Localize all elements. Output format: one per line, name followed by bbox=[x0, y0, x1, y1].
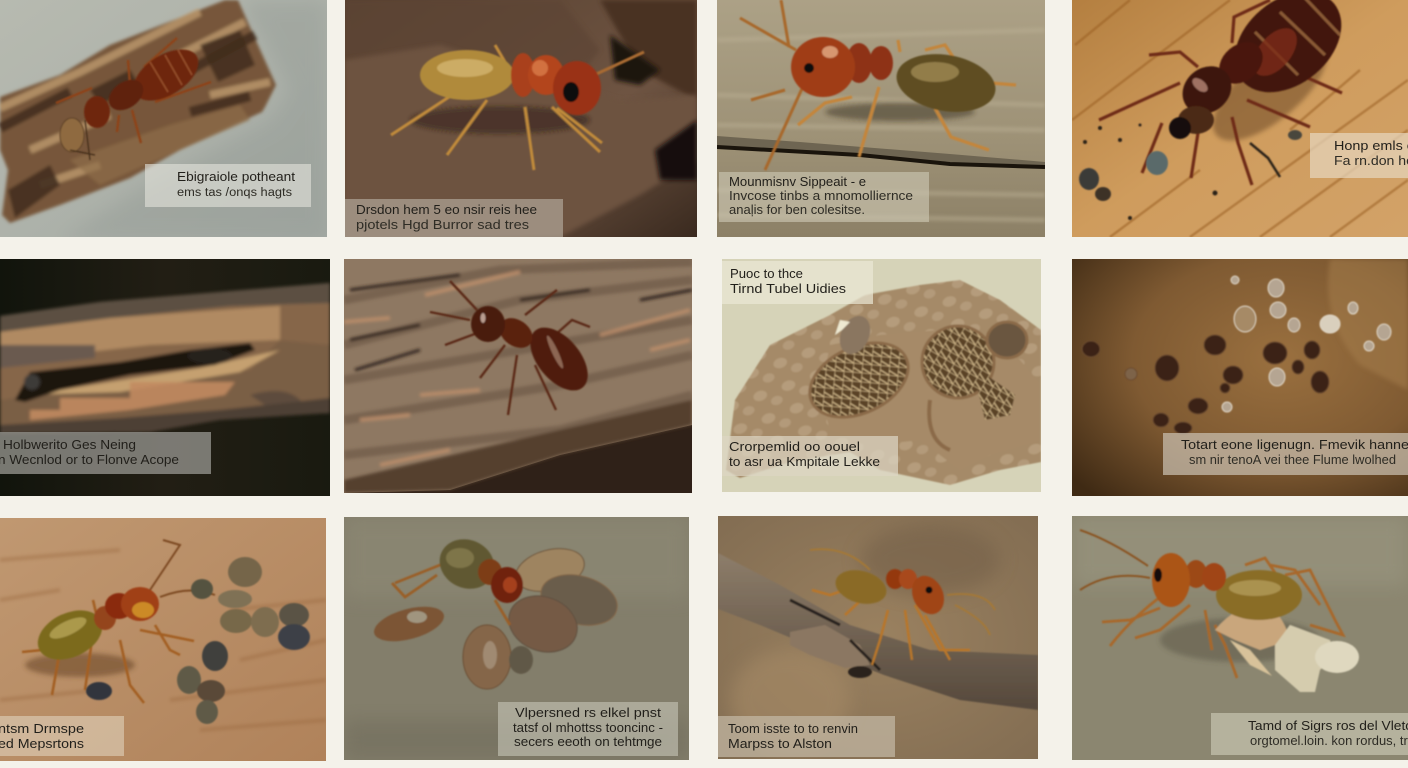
bark piece bbox=[0, 0, 276, 223]
panel: termite on weathered plank bbox=[717, 0, 1045, 237]
caption: Holbwerito Ges Neing bbox=[3, 437, 136, 452]
caption bbox=[1211, 713, 1408, 755]
caption bbox=[718, 716, 895, 757]
termite and shells bbox=[370, 530, 623, 689]
termite bbox=[391, 45, 644, 170]
panel: termite with seeds on wood bbox=[0, 518, 326, 761]
caption: tatsf ol mhottss tooncinc - bbox=[513, 720, 663, 735]
pale droplets bbox=[1222, 276, 1391, 412]
caption: Vlpersned rs elkel pnst bbox=[515, 705, 661, 720]
termite and fungus bbox=[1080, 530, 1359, 692]
termite bbox=[740, 0, 1016, 170]
caption: Drsdon hem 5 eo nsir reis hee bbox=[356, 202, 537, 217]
caption: anaļis for ben colesitse. bbox=[729, 202, 865, 217]
caption bbox=[0, 432, 211, 474]
caption: sm nir tenoA vei thee Flume lwolhed bbox=[1189, 452, 1396, 467]
panel: dark termite on pine wood with debris bbox=[1072, 0, 1408, 237]
caption: ems tas /onqs hagts bbox=[177, 187, 292, 199]
panel: termite with pale fungus on sand bbox=[1072, 516, 1408, 760]
panel: fungus comb on pale background bbox=[722, 259, 1041, 492]
caption: secers eeoth on tehtmge bbox=[514, 734, 662, 749]
panel: termite on bark piece over grey surface bbox=[0, 0, 327, 240]
termite bbox=[1099, 0, 1361, 185]
caption bbox=[719, 172, 929, 222]
caption: Marpss to Alston bbox=[728, 736, 832, 751]
caption: bottom: to asr ua Kmpitale Lekke bbox=[729, 454, 880, 469]
caption: bottom bbox=[722, 436, 898, 476]
caption: pjotels Hgd Burror sad tres bbox=[356, 217, 530, 232]
caption bbox=[1310, 133, 1408, 178]
twig bbox=[718, 553, 1038, 710]
caption: Fa rn.don he bbox=[1334, 153, 1408, 168]
termite bbox=[430, 281, 599, 415]
caption: ntsm Drmspe bbox=[0, 721, 84, 736]
caption bbox=[1163, 433, 1408, 475]
fungus comb bbox=[726, 280, 1041, 485]
caption: bottom: Crorpemlid oo oouel bbox=[729, 439, 860, 454]
caption: top: Tirnd Tubel Uidies bbox=[730, 281, 847, 296]
panel: hollowed branch on dark background bbox=[0, 259, 330, 496]
caption bbox=[0, 716, 124, 756]
caption: Totart eone ligenugn. Fmevik hanne bbox=[1181, 437, 1408, 452]
dark droplets bbox=[1082, 335, 1329, 434]
caption: Invcose tinbs a mnomolliernce bbox=[729, 188, 913, 203]
panel: golden termite on dark bark bbox=[345, 0, 697, 237]
panel: termite on twig with blurred background bbox=[718, 516, 1038, 759]
panel: termite on striated bark bbox=[344, 259, 692, 493]
termite bbox=[56, 38, 211, 160]
caption: Honp emls c bbox=[1334, 138, 1408, 153]
panel: termite among shells on sand bbox=[344, 517, 689, 760]
caption: n Wecnlod or to Flonve Acope bbox=[0, 452, 179, 467]
termite bbox=[810, 549, 995, 665]
caption: Toom isste to to renvin bbox=[728, 721, 858, 736]
caption: Tamd of Sigrs ros del Vleto bbox=[1248, 718, 1408, 733]
debris bbox=[1079, 124, 1302, 220]
termite bbox=[22, 540, 215, 703]
damaged branch bbox=[0, 283, 330, 434]
caption bbox=[145, 164, 311, 207]
caption: ed Mepsrtons bbox=[0, 736, 85, 751]
panel: droplets on brown wood bbox=[1072, 259, 1408, 496]
caption bbox=[498, 702, 678, 756]
caption: top bbox=[722, 261, 873, 304]
caption bbox=[345, 199, 563, 237]
caption: top: Puoc to thce bbox=[730, 266, 803, 281]
seeds bbox=[86, 557, 310, 724]
caption: Mounmisnv Sippeait - e bbox=[729, 174, 866, 189]
caption: Ebigraiole potheant bbox=[177, 169, 295, 184]
